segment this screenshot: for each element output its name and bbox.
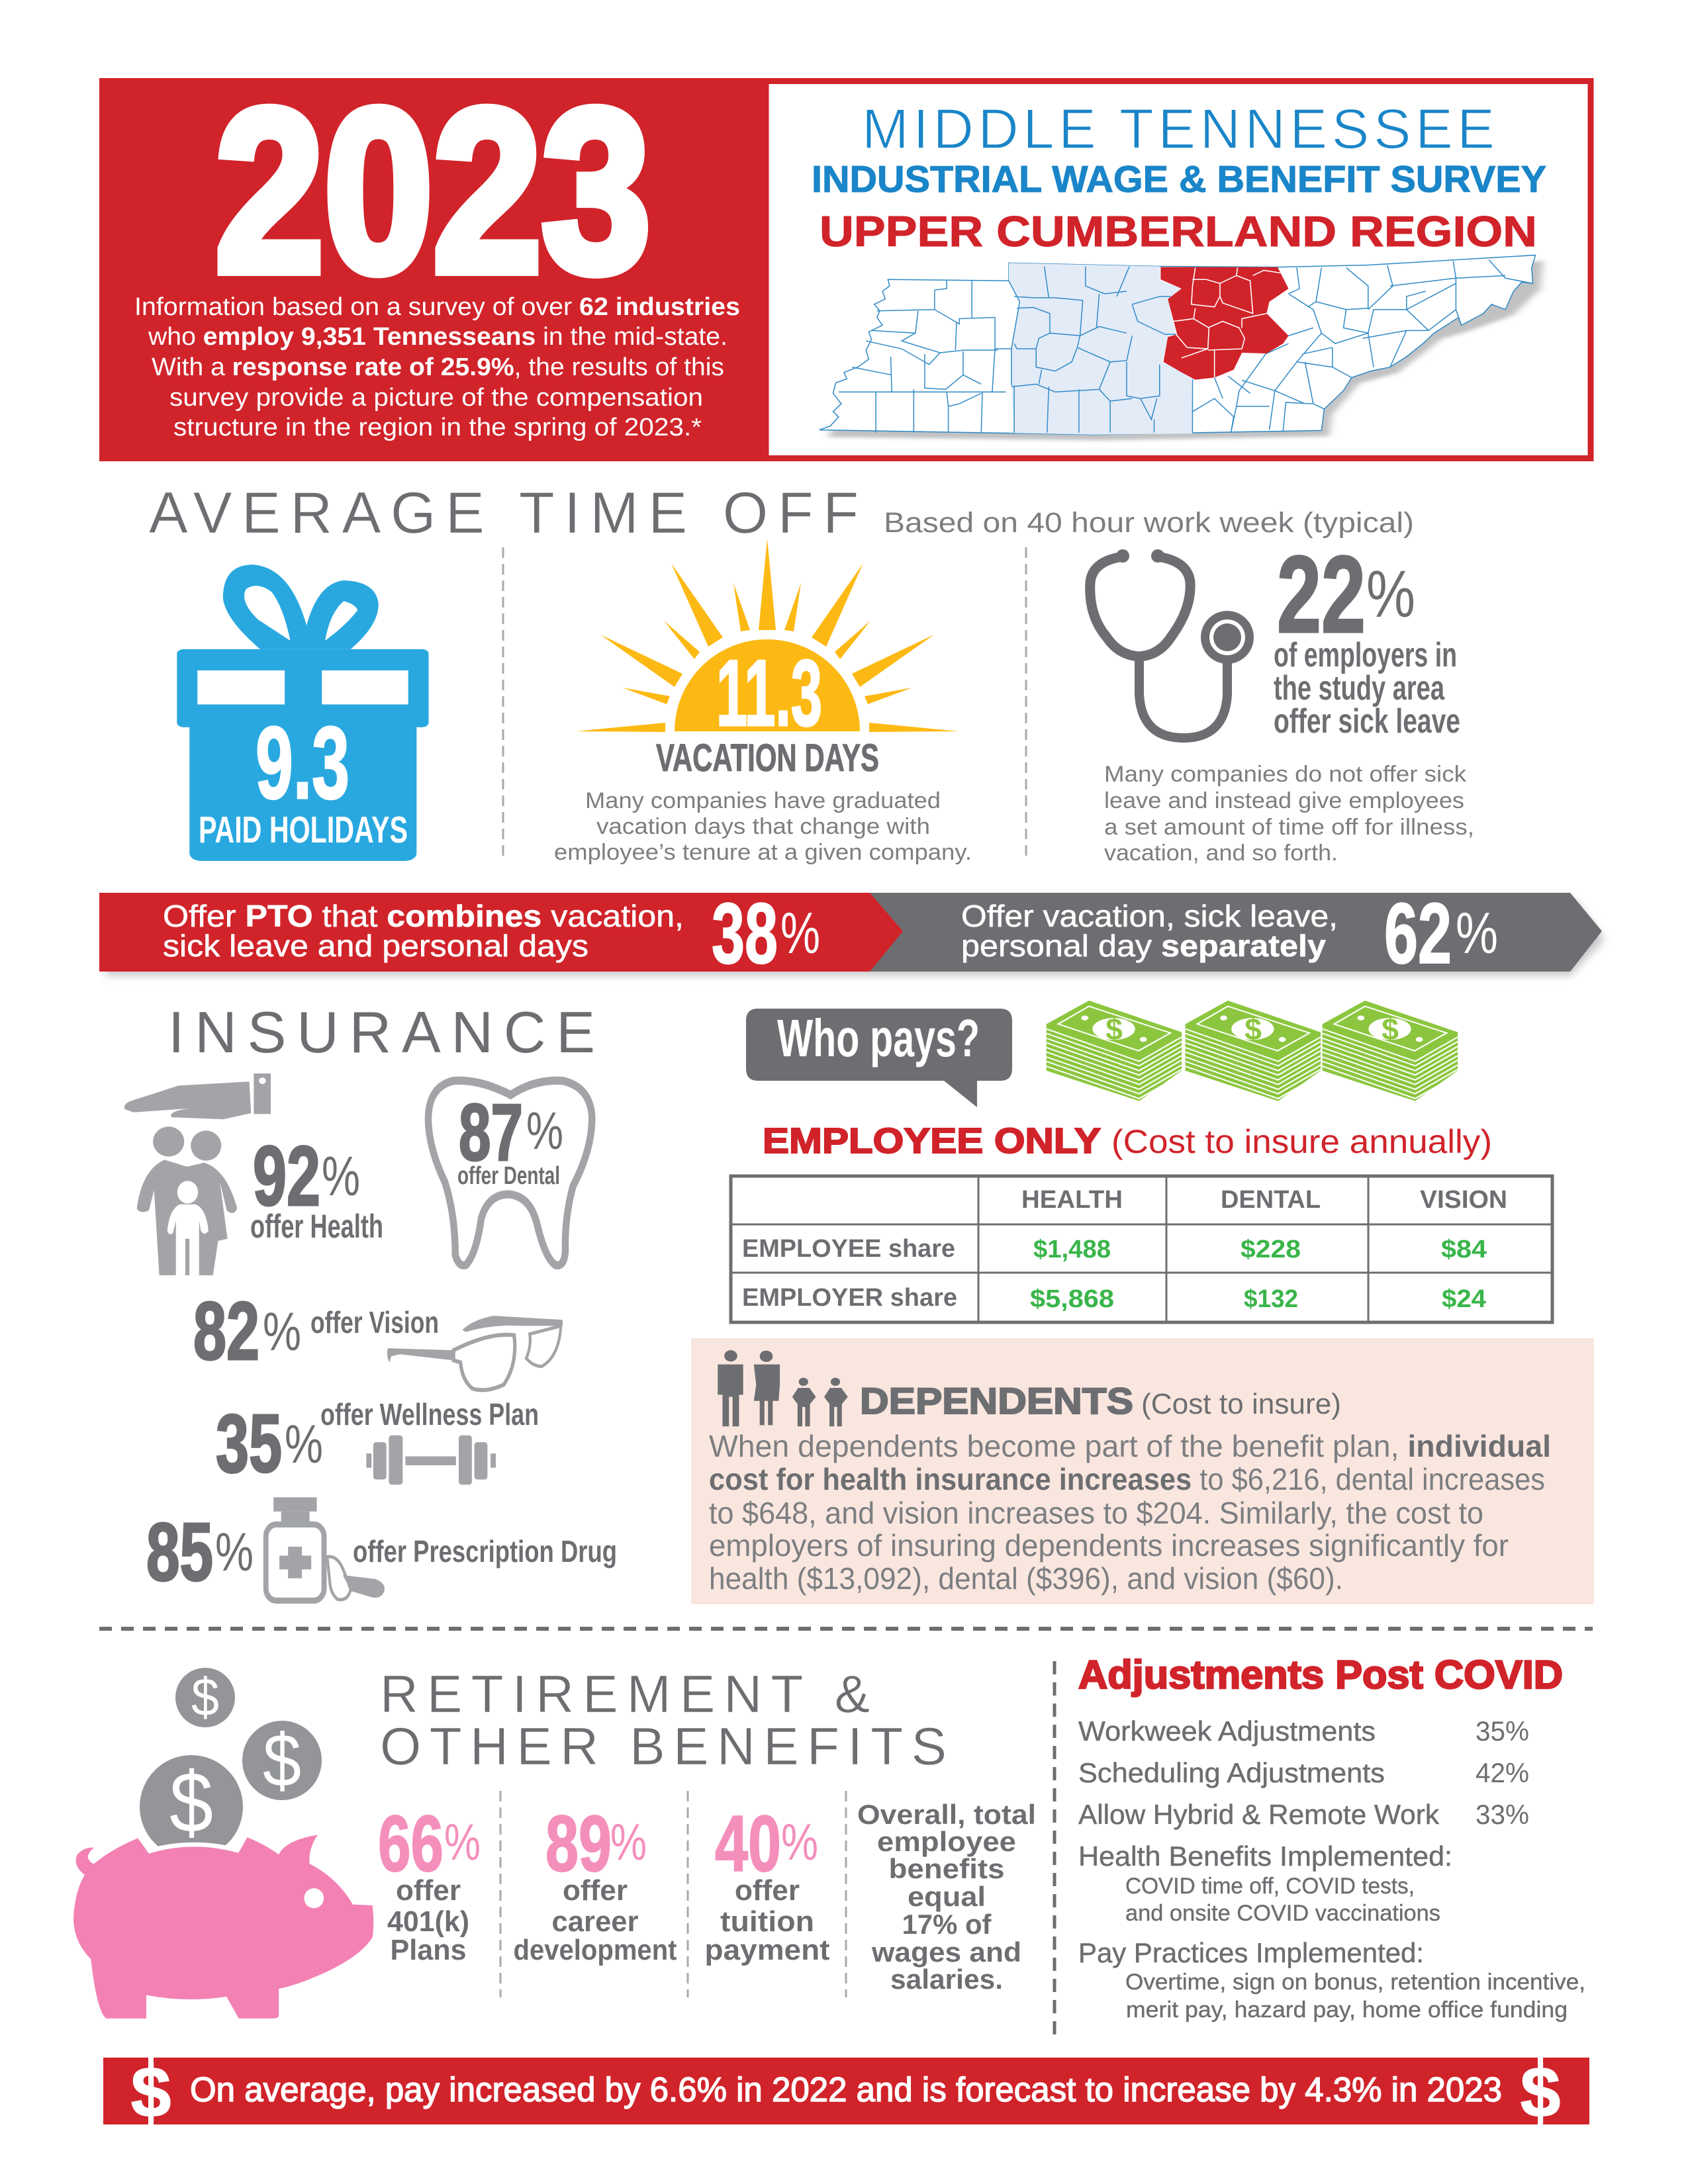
- stat: 85% offer prescription drug: %: [215, 1522, 254, 1582]
- stat: 35% offer wellness plan: offer Wellness Plan: [320, 1397, 539, 1432]
- stat: 92% offer health: 92: [253, 1129, 320, 1224]
- heading: employee only: [763, 1121, 1492, 1161]
- heading: Retirement & other benefits: RETIREMENT &: [380, 1664, 870, 1723]
- text: vacation note: vacation days that change with: [596, 814, 930, 839]
- stat: 85% offer prescription drug: 85: [146, 1507, 213, 1598]
- stat: 85% offer prescription drug: [146, 1507, 617, 1598]
- stat: 82% offer vision: 82: [193, 1286, 259, 1377]
- label: vacation days: VACATION DAYS: [656, 737, 879, 780]
- label: employers offering sick leave: of employers in: [1274, 636, 1457, 674]
- icon: coins: [140, 1668, 322, 1858]
- list: pay practices implemented: [1078, 1937, 1585, 2023]
- stat: 40% tuition payment: [704, 1799, 830, 1966]
- heading: employee only: EMPLOYEE ONLY: [763, 1121, 1101, 1161]
- stat: 66% 401(k): 66: [378, 1799, 444, 1888]
- text: PTO combined: [163, 899, 684, 963]
- stat: 82% offer vision: [193, 1286, 439, 1377]
- table: employee and employer cost share: $24: [1442, 1285, 1486, 1313]
- table: employee and employer cost share: $1,488: [1033, 1236, 1111, 1263]
- text: sick leave note: [1104, 762, 1474, 866]
- heading: Upper Cumberland Region: UPPER CUMBERLAND REGION: [820, 207, 1537, 255]
- heading: Retirement & other benefits: [380, 1664, 947, 1776]
- panel: paid holidays: [177, 565, 429, 861]
- list: adjustment percentages: 42%: [1476, 1757, 1529, 1788]
- label: employers offering sick leave: the study area: [1274, 669, 1445, 707]
- icon: right dollar sign: $: [1521, 2052, 1560, 2132]
- text: pay increase statement: On average, pay increased by 6.6% in 2022 and is forecast to increase by 4.3% in 2023: [190, 2071, 1502, 2109]
- icon: sun: [576, 539, 959, 732]
- arrow: separate leave: [794, 893, 1602, 972]
- stat: 40% tuition payment: tuition: [720, 1905, 814, 1938]
- panel: vacation days: [554, 539, 972, 865]
- heading: Middle Tennessee: MIDDLE TENNESSEE: [862, 98, 1495, 161]
- list: health benefits implemented: [1078, 1841, 1452, 1926]
- stat: 66% 401(k): %: [444, 1813, 481, 1871]
- list: adjustment percentages: Scheduling Adjustments: [1078, 1757, 1385, 1788]
- stat: 40% tuition payment: offer: [735, 1874, 800, 1907]
- stat: 89% career development: offer: [563, 1874, 628, 1907]
- stat: 87% offer dental: 87: [459, 1087, 523, 1177]
- icon: piggy bank with coins: [73, 1668, 373, 2019]
- stat: 35% offer wellness plan: 35: [216, 1398, 282, 1490]
- text: dependents cost explanation: cost for health insurance increases to $6,216, dental increases: [709, 1462, 1545, 1496]
- table: employee and employer cost share: [731, 1176, 1552, 1322]
- list: health benefits implemented: Health Benefits Implemented:: [1078, 1841, 1452, 1872]
- heading: Insurance: INSURANCE: [168, 999, 595, 1065]
- text: PTO combined: Offer PTO that combines vacation,: [163, 899, 684, 933]
- table: employee and employer cost share: EMPLOYEE share: [742, 1235, 955, 1263]
- list: health benefits implemented: COVID time off, COVID tests,: [1125, 1874, 1415, 1899]
- icon: medicine bottle and pills: [266, 1497, 385, 1601]
- list: adjustment percentages: Allow Hybrid & Remote Work: [1078, 1799, 1440, 1830]
- text: dependents cost explanation: When dependents become part of the benefit plan, individual: [709, 1429, 1551, 1463]
- text: sick leave note: vacation, and so forth.: [1104, 841, 1338, 866]
- table: employee and employer cost share: $84: [1441, 1236, 1487, 1263]
- heading: dependents: (Cost to insure): [1141, 1388, 1341, 1420]
- heading: Industrial Wage & Benefit Survey: INDUSTRIAL WAGE & BENEFIT SURVEY: [812, 158, 1546, 201]
- text: total employee benefits: benefits: [888, 1853, 1005, 1884]
- text: total employee benefits: Overall, total: [857, 1799, 1036, 1830]
- map: Tennessee counties: [820, 255, 1543, 440]
- list: adjustment percentages: 35%: [1476, 1715, 1529, 1747]
- stat: 22%: 22: [1277, 533, 1366, 655]
- labels: dollar signs on bills: $: [1382, 1012, 1399, 1046]
- list: pay practices implemented: Overtime, sign on bonus, retention incentive,: [1125, 1970, 1585, 1995]
- stat: 82% offer vision: %: [263, 1302, 301, 1362]
- icon: pig: [73, 1835, 373, 2019]
- text: sick leave note: leave and instead give employees: [1104, 788, 1464, 813]
- icon: coins: $: [169, 1754, 213, 1850]
- text: dependents cost explanation: to $648, and vision increases to $204. Similarly, the cost to: [709, 1496, 1483, 1530]
- stat: 89% career development: development: [514, 1934, 677, 1966]
- stat: 85% offer prescription drug: offer Prescription Drug: [353, 1534, 617, 1569]
- icon: family: [137, 1126, 237, 1275]
- heading: adjustments post COVID: Adjustments Post COVID: [1078, 1653, 1563, 1697]
- labels: dollar signs on bills: [1105, 1012, 1399, 1046]
- list: pay practices implemented: Pay Practices Implemented:: [1078, 1937, 1424, 1968]
- text: sick leave note: Many companies do not offer sick: [1104, 762, 1467, 787]
- table: employee and employer cost share: $5,868: [1030, 1285, 1114, 1313]
- stat: 11.3: 11.3: [716, 641, 822, 746]
- text: total employee benefits: equal: [908, 1881, 986, 1912]
- stat: 82% offer vision: offer Vision: [310, 1305, 439, 1340]
- stat: 92% offer health: [250, 1129, 383, 1245]
- labels: dollar signs on bills: $: [1105, 1012, 1123, 1046]
- text block: survey intro: Information based on a survey of over 62 industries: [134, 293, 740, 321]
- stat: 35% offer wellness plan: %: [285, 1414, 323, 1475]
- icon: stethoscope: [1090, 549, 1254, 738]
- list: adjustment percentages: [1078, 1715, 1529, 1830]
- stat: 89% career development: 89: [545, 1799, 612, 1888]
- label: employers offering sick leave: [1274, 636, 1460, 741]
- text: dependents cost explanation: health ($13,092), dental ($396), and vision ($60).: [709, 1561, 1343, 1596]
- icon: coins: $: [191, 1668, 219, 1727]
- text: vacation note: employee’s tenure at a given company.: [554, 840, 972, 865]
- text: total employee benefits: employee: [877, 1826, 1016, 1857]
- stat: 38%: 38: [712, 885, 778, 981]
- banner: pay increase forecast: [103, 2052, 1589, 2132]
- stat: 38%: %: [780, 900, 820, 966]
- stat: 89% career development: %: [610, 1813, 647, 1871]
- heading: dependents: DEPENDENTS: [860, 1380, 1133, 1422]
- text: separate leave: [961, 899, 1338, 963]
- table: employee and employer cost share: HEALTH: [1021, 1186, 1123, 1214]
- text block: survey intro: survey provide a picture of the compensation: [169, 384, 703, 412]
- stat: 62%: 62: [1384, 885, 1452, 981]
- text: separate leave: Offer vacation, sick leave,: [961, 899, 1338, 933]
- icon: coins: $: [263, 1719, 301, 1802]
- stat: 87% offer dental: offer Dental: [457, 1162, 560, 1190]
- heading: dependents: [860, 1380, 1341, 1422]
- caption: based on 40 hour work week: Based on 40 hour work week (typical): [884, 507, 1414, 539]
- text: total employee benefits: [857, 1799, 1036, 1995]
- panel: survey title and map: [766, 81, 1591, 458]
- table: employee and employer cost share: EMPLOYER share: [742, 1284, 957, 1312]
- panel: dependents: [691, 1338, 1594, 1604]
- stat: 62%: %: [1456, 900, 1498, 966]
- text: separate leave: personal day separately: [961, 929, 1326, 963]
- panel: year and survey intro: [99, 62, 769, 461]
- stat: 40% tuition payment: payment: [704, 1934, 830, 1966]
- icon: tooth: [428, 1081, 592, 1265]
- stat: 9.3: 9.3: [256, 705, 350, 820]
- icon: stacks of money: [1047, 1001, 1458, 1101]
- stat: 66% 401(k): Plans: [391, 1934, 466, 1966]
- text block: survey intro: who employ 9,351 Tennesseans in the mid-state.: [148, 323, 727, 351]
- heading: Retirement & other benefits: OTHER BENEFITS: [380, 1717, 947, 1776]
- icon: left dollar sign: $: [131, 2052, 171, 2132]
- stat: 66% 401(k): offer: [396, 1874, 461, 1907]
- label: paid holidays: PAID HOLIDAYS: [199, 809, 408, 851]
- text: total employee benefits: salaries.: [890, 1964, 1003, 1995]
- list: adjustment percentages: Workweek Adjustments: [1078, 1715, 1376, 1747]
- table: employee and employer cost share: $228: [1241, 1236, 1301, 1263]
- text: dependents cost explanation: [709, 1429, 1551, 1596]
- icon: protective hand: [124, 1073, 271, 1119]
- stat: 35% offer wellness plan: [216, 1397, 539, 1490]
- text block: survey intro: [134, 293, 740, 441]
- text block: survey intro: structure in the region in the spring of 2023.*: [173, 414, 702, 441]
- list: health benefits implemented: and onsite COVID vaccinations: [1125, 1901, 1440, 1926]
- heading: employee only: (Cost to insure annually): [1111, 1123, 1492, 1160]
- icon: family of four: [718, 1350, 848, 1426]
- icon: dumbbell: [366, 1435, 496, 1484]
- text: dependents cost explanation: employers of insuring dependents increases significantly for: [709, 1528, 1509, 1563]
- text block: survey intro: With a response rate of 25.9% , the results of this: [152, 353, 724, 381]
- label: employers offering sick leave: offer sick leave: [1274, 702, 1460, 741]
- icon: gift box: [177, 565, 429, 861]
- stat: 92% offer health: offer Health: [250, 1208, 383, 1245]
- text: total employee benefits: 17% of: [902, 1909, 992, 1940]
- heading: Average Time Off: AVERAGE TIME OFF: [149, 480, 859, 545]
- stat: 66% 401(k): 401(k): [387, 1905, 469, 1938]
- labels: dollar signs on bills: $: [1244, 1012, 1262, 1046]
- table: employee and employer cost share: DENTAL: [1221, 1186, 1321, 1214]
- stat: 89% career development: [514, 1799, 677, 1966]
- stat: 40% tuition payment: 40: [715, 1799, 781, 1888]
- stat: 89% career development: career: [552, 1905, 638, 1938]
- stat: 87% offer dental: %: [526, 1101, 563, 1160]
- panel: insurance icons: [124, 1073, 592, 1601]
- stat: 22%: %: [1366, 557, 1415, 631]
- text: PTO combined: sick leave and personal days: [163, 929, 588, 963]
- banner: PTO versus separate leave: [99, 885, 1605, 981]
- stat: 92% offer health: %: [322, 1145, 360, 1207]
- text: total employee benefits: wages and: [871, 1936, 1021, 1968]
- text: vacation note: Many companies have graduated: [585, 788, 941, 813]
- panel: sick leave: [1090, 533, 1474, 866]
- callout: who pays speech bubble: [746, 1009, 1012, 1107]
- panel: adjustments post COVID: [1078, 1653, 1585, 2023]
- stat: 40% tuition payment: %: [781, 1813, 818, 1871]
- list: adjustment percentages: 33%: [1476, 1799, 1529, 1830]
- table: employee and employer cost share: VISION: [1420, 1186, 1507, 1214]
- icon: glasses: [387, 1316, 563, 1390]
- title: 2023: 2023: [215, 62, 651, 320]
- text: sick leave note: a set amount of time off for illness,: [1104, 815, 1474, 840]
- list: pay practices implemented: merit pay, hazard pay, home office funding: [1126, 1997, 1568, 2023]
- arrow: PTO: [99, 893, 903, 972]
- callout: who pays speech bubble: Who pays?: [777, 1009, 980, 1068]
- table: employee and employer cost share: $132: [1244, 1285, 1298, 1313]
- stat: 66% 401(k): [378, 1799, 481, 1966]
- text: vacation note: [554, 788, 972, 865]
